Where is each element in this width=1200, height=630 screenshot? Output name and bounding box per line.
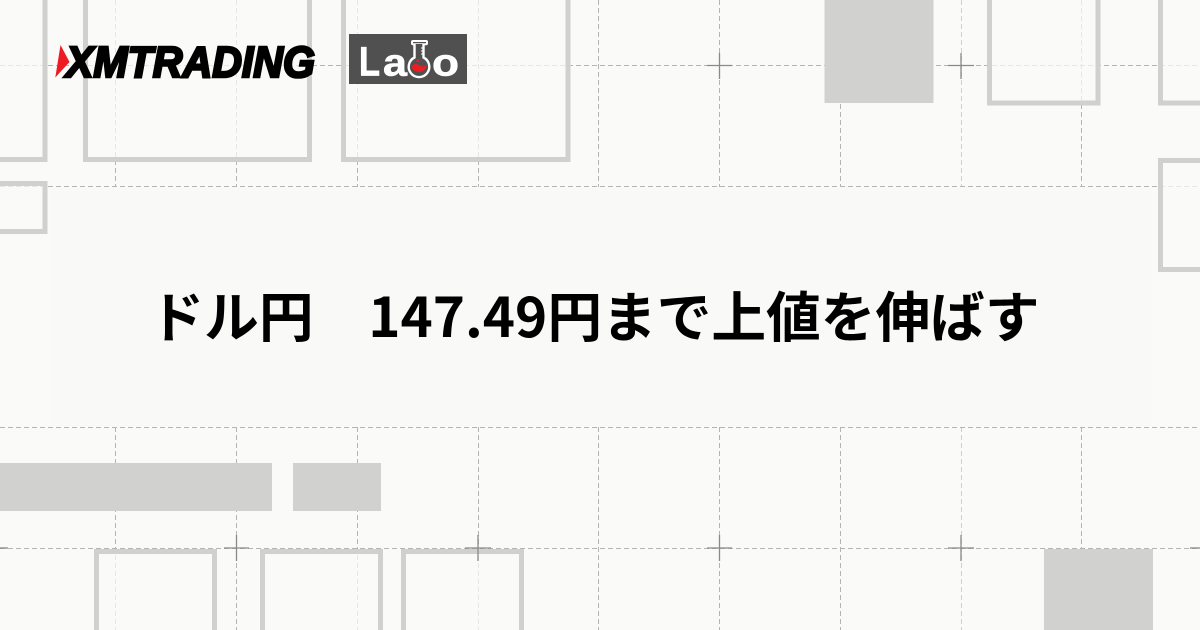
logo letter L: L	[359, 38, 380, 84]
block: top solid	[824, 0, 934, 103]
frame: bottom second	[262, 552, 380, 630]
logo: XMTRADING	[55, 38, 315, 87]
frame: left small	[0, 184, 45, 232]
frame: top left partial	[0, 0, 45, 160]
central title panel	[52, 188, 1152, 426]
frame: top left second	[86, 0, 310, 160]
frame: top right partial	[1160, 0, 1200, 103]
frame: top right	[990, 0, 1098, 103]
logo letter a: a	[383, 42, 408, 84]
logo: Lab	[349, 34, 467, 84]
frame: bottom first	[96, 552, 214, 630]
title: ドル円 147.49円まで上値を伸ばす	[149, 274, 1040, 353]
icon: flask	[409, 41, 429, 77]
logo background	[349, 34, 467, 84]
logo wordmark: XMTRADING	[63, 38, 315, 87]
block: bottom right solid	[1044, 549, 1153, 630]
block: bottom left short	[293, 463, 381, 511]
frame: right middle	[1160, 160, 1200, 270]
block: bottom left long	[0, 463, 272, 511]
logo letter o: o	[432, 42, 459, 84]
icon: red triangle	[55, 45, 70, 78]
frame: bottom third	[404, 552, 522, 630]
frame: top left third	[344, 0, 568, 160]
